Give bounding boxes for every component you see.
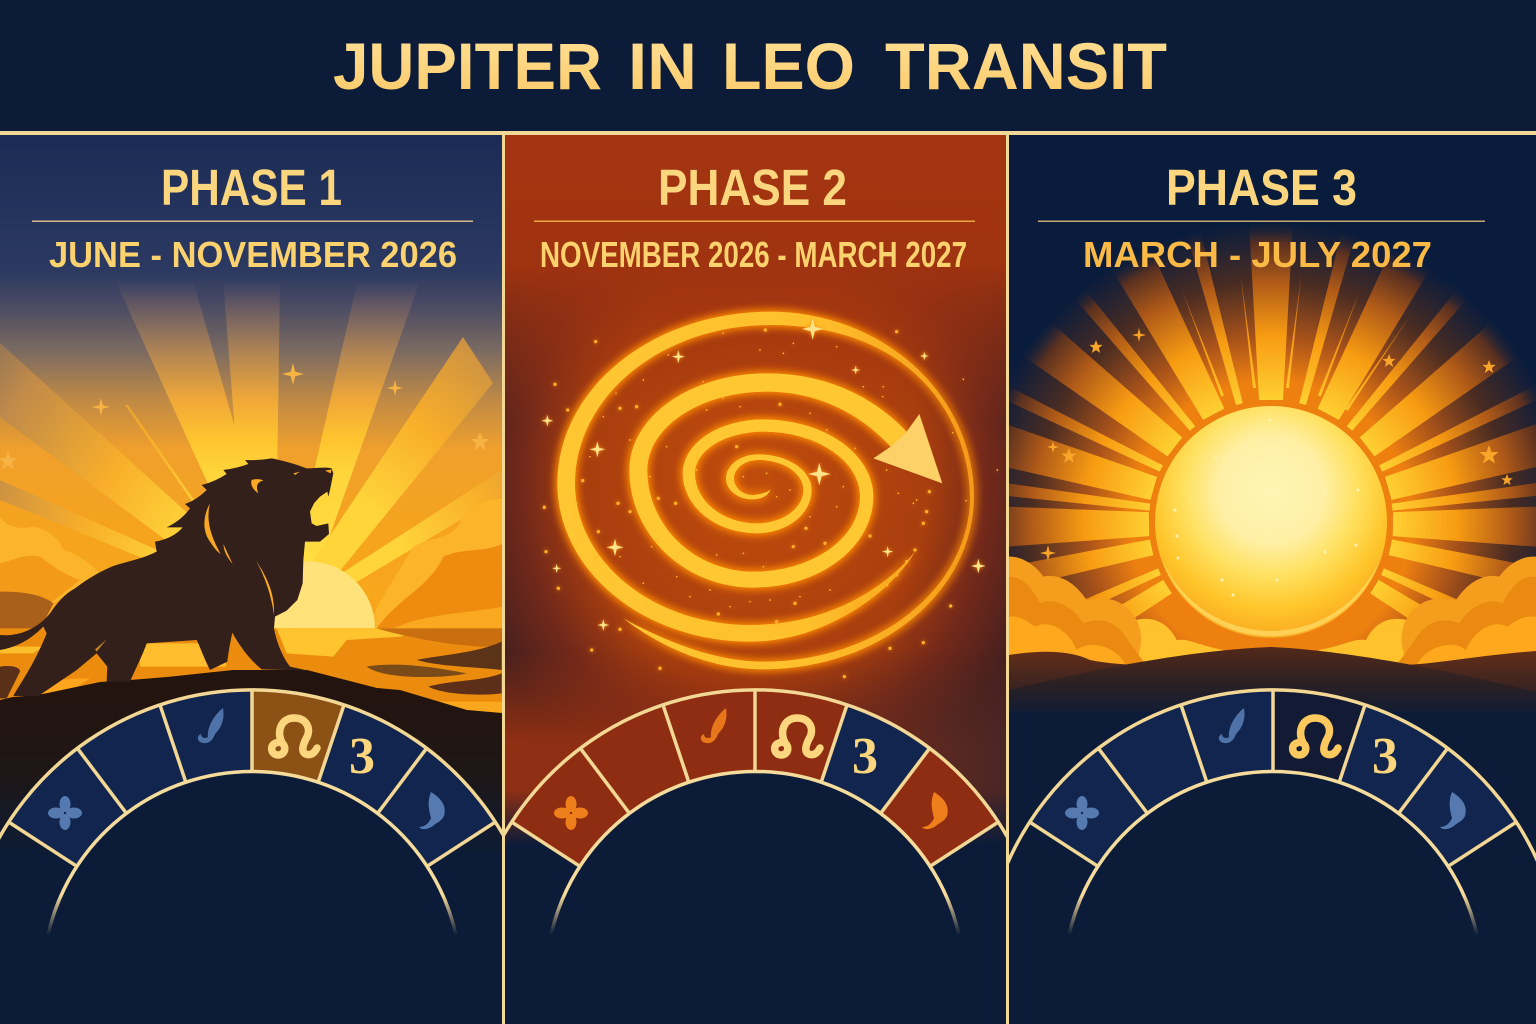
phase 3 title: PHASE 3 <box>1166 159 1357 216</box>
icon: flower symbol <box>1065 796 1099 830</box>
phase 3 clouds <box>1003 557 1536 670</box>
horizon bands <box>0 628 503 702</box>
inner spiral band <box>629 373 907 588</box>
title: LEO <box>722 29 855 103</box>
icon: Leo glyph <box>775 718 820 755</box>
numeral 3: 3 <box>852 728 878 785</box>
highlighted Leo segment <box>252 690 344 782</box>
phase 1 stars <box>0 363 490 470</box>
icon: left flame symbol <box>701 708 727 743</box>
title: TRANSIT <box>885 29 1167 103</box>
icon: roaring lion silhouette <box>0 458 333 696</box>
icon: Leo glyph <box>1293 718 1338 755</box>
left clouds <box>0 517 100 630</box>
wheel segments <box>9 690 495 866</box>
title: IN <box>628 29 697 103</box>
spiral bands <box>557 312 974 669</box>
phase 3 background <box>1009 232 1536 651</box>
phase 1 sun rays <box>0 287 502 582</box>
panel: phase 1 <box>0 133 503 900</box>
sparkle dots <box>544 330 997 677</box>
icon: right flame symbol <box>419 792 445 829</box>
wheel segments <box>512 690 998 866</box>
wheel frame <box>0 690 522 935</box>
zodiac wheel: phase 2 <box>485 690 1025 1024</box>
icon: flower symbol <box>48 796 82 830</box>
wheel inner disc <box>546 771 964 1024</box>
heading: phase 3 <box>1038 159 1485 275</box>
phase 3 dates: MARCH - JULY 2027 <box>1083 234 1432 275</box>
phase 1 title: PHASE 1 <box>161 159 342 216</box>
wheel inner disc <box>102 773 402 838</box>
zodiac wheel: phase 1 <box>0 688 502 934</box>
zodiac wheel: phase 3 <box>1003 690 1536 1024</box>
numeral 3: 3 <box>349 728 375 785</box>
phase 3 sun disc <box>1149 400 1393 644</box>
phase 3 navy ground <box>1080 740 1462 750</box>
phase 2 background <box>505 135 1006 842</box>
phase 3 hills <box>1009 647 1536 712</box>
phase 3 sun rays <box>1009 229 1536 618</box>
icon: flower symbol <box>554 796 588 830</box>
icon: left flame symbol <box>1219 708 1245 743</box>
highlighted Leo segment <box>1273 690 1365 782</box>
phase 2 dates: NOVEMBER 2026 - MARCH 2027 <box>540 234 967 275</box>
right clouds <box>370 498 503 630</box>
phase 1 dates: JUNE - NOVEMBER 2026 <box>49 234 457 275</box>
wheel inner disc <box>1064 771 1482 1024</box>
icon: Leo glyph <box>272 718 317 755</box>
phase 1 hill <box>0 670 502 838</box>
heading: phase 1 <box>32 159 473 275</box>
icon: right flame symbol <box>922 792 948 829</box>
wheel frame <box>485 690 1025 935</box>
panel: phase 2 <box>505 133 1006 1024</box>
title: JUPITER <box>333 29 602 103</box>
phase 2 title: PHASE 2 <box>658 159 847 216</box>
numeral 3: 3 <box>1372 728 1398 785</box>
heading: phase 2 <box>534 159 975 275</box>
wheel frame <box>1003 690 1536 935</box>
wheel segments <box>1030 690 1516 866</box>
outer spiral band <box>557 312 974 669</box>
icon: right flame symbol <box>1440 792 1466 829</box>
right cloud <box>1319 557 1536 670</box>
phase 1 sky <box>0 133 502 733</box>
setting sun <box>274 561 375 628</box>
phase 1 landscape <box>0 498 503 702</box>
arrow head <box>873 414 942 483</box>
icon: left flame symbol <box>198 708 224 743</box>
sparkle stars <box>541 318 986 631</box>
panel: phase 3 <box>1009 227 1536 710</box>
navy numeral segment <box>821 705 930 813</box>
left cloud <box>1003 557 1223 670</box>
icon: spiral with arrow <box>541 312 997 677</box>
phase 3 stars <box>1040 328 1513 561</box>
